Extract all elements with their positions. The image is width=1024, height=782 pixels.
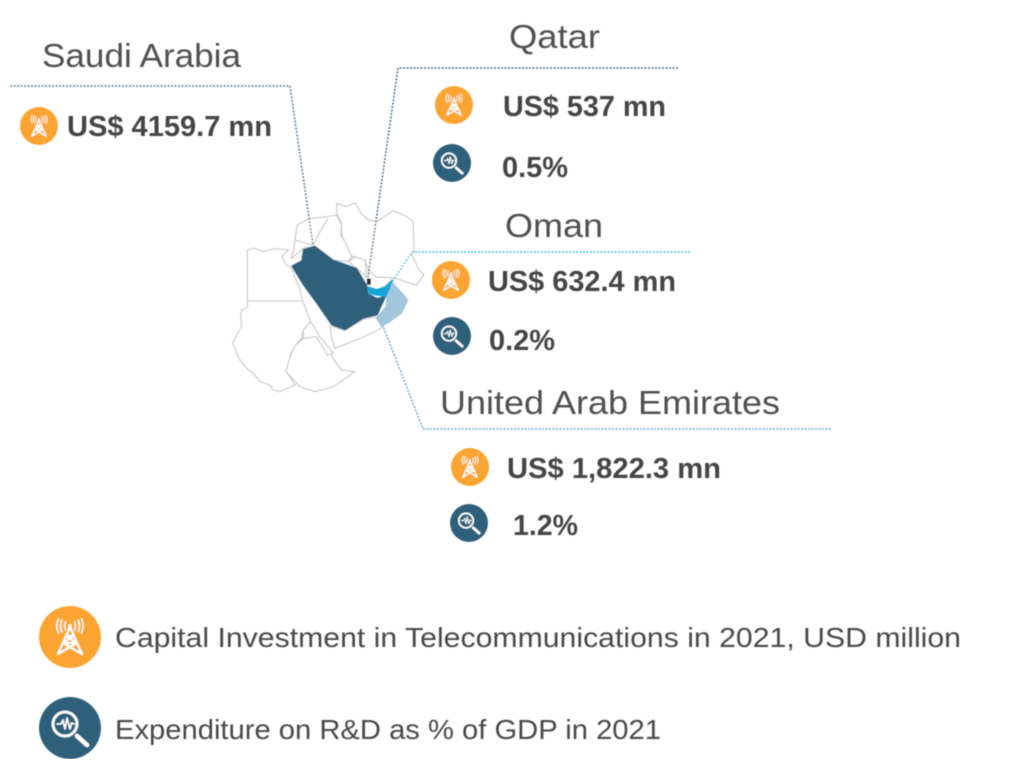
value: investment: US$ 4159.7 mn <box>67 111 272 143</box>
map: Oman <box>376 282 408 327</box>
value: R&D share: 1.2% <box>513 510 578 542</box>
value: investment: US$ 1,822.3 mn <box>507 453 721 485</box>
legend text: R&D expenditure: Expenditure on R&D as % of GDP in 2021 <box>115 714 661 745</box>
icon: telecom tower <box>432 261 470 299</box>
map: surrounding country outlines <box>233 203 424 392</box>
panel: United Arab Emirates <box>440 384 780 542</box>
icon: R&D magnifier <box>433 144 471 182</box>
leader line: Qatar <box>368 68 678 277</box>
icon: R&D magnifier <box>433 317 471 355</box>
icon: telecom tower <box>451 448 489 486</box>
panel: Saudi Arabia <box>20 37 272 145</box>
value: R&D share: 0.5% <box>502 152 568 184</box>
value: investment: US$ 632.4 mn <box>488 266 676 298</box>
leader line: Oman <box>392 252 690 282</box>
legend <box>39 606 961 759</box>
map: GCC region <box>233 203 424 392</box>
leader line: United Arab Emirates <box>383 326 831 429</box>
legend icon: telecom tower <box>39 606 101 668</box>
icon: telecom tower <box>435 86 473 124</box>
value: investment: US$ 537 mn <box>503 91 666 123</box>
icon: R&D magnifier <box>450 504 488 542</box>
legend text: capital investment: Capital Investment in Telecommunications in 2021, USD million <box>115 622 961 653</box>
legend icon: R&D magnifier <box>39 697 101 759</box>
panel: Qatar <box>433 18 666 184</box>
map: United Arab Emirates <box>368 279 393 297</box>
map: Qatar <box>367 279 371 285</box>
heading: Qatar: Qatar <box>509 18 600 55</box>
leader line: Saudi Arabia <box>10 86 313 245</box>
map: Saudi Arabia <box>292 246 386 330</box>
heading: Saudi Arabia: Saudi Arabia <box>42 37 242 74</box>
heading: United Arab Emirates: United Arab Emirates <box>440 384 780 421</box>
heading: Oman: Oman <box>505 207 603 244</box>
panel: Oman <box>432 207 676 357</box>
value: R&D share: 0.2% <box>489 325 555 357</box>
icon: telecom tower <box>20 107 58 145</box>
